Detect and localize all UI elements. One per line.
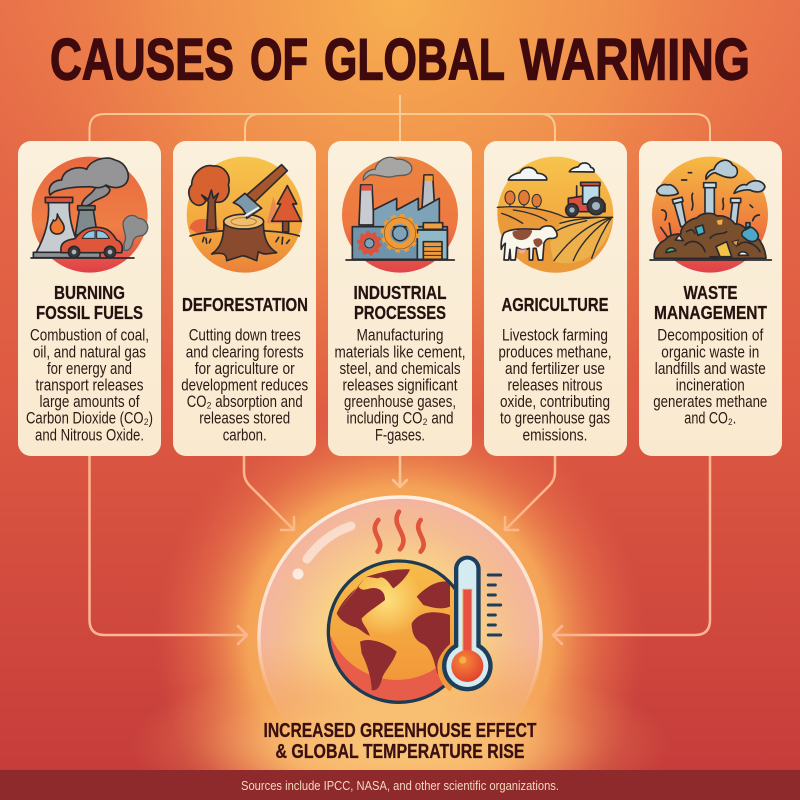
greenhouse bubble with globe and thermometer [150, 495, 649, 770]
text block [181, 327, 308, 444]
arrow: deforestation to globe [244, 456, 294, 530]
heading: FOSSIL FUELS [36, 303, 143, 323]
arrow: agriculture to globe [505, 456, 555, 530]
heading: MANAGEMENT [654, 303, 767, 323]
text block: releases stored [199, 410, 290, 428]
text block: for energy and [47, 360, 132, 378]
text block: Combustion of coal, [30, 327, 149, 345]
top connector lines [90, 95, 710, 141]
arrow: waste to globe [553, 456, 710, 644]
text block: carbon. [223, 426, 267, 444]
title: WARMING [520, 28, 750, 92]
text block: releases nitrous [508, 376, 602, 394]
text block: emissions. [522, 426, 588, 444]
text block: Carbon Dioxide (CO₂) [26, 410, 153, 428]
text block: incineration [676, 376, 745, 394]
text block [498, 327, 612, 444]
text block: for agriculture or [195, 360, 295, 378]
text block: Cutting down trees [189, 327, 301, 345]
panel: industrial processes [328, 141, 472, 456]
title [50, 28, 750, 92]
result label: & GLOBAL TEMPERATURE RISE [276, 740, 524, 763]
text block: and fertilizer use [505, 360, 605, 378]
icon: heat waves [375, 512, 424, 552]
text block: development reduces [181, 376, 308, 394]
footer bar [0, 770, 800, 800]
text block: oxide, contributing [500, 393, 610, 411]
text block: Decomposition of [657, 327, 764, 345]
heading: AGRICULTURE [502, 295, 608, 315]
text block: Livestock farming [502, 327, 608, 345]
text block: and clearing forests [186, 343, 304, 361]
title: OF [250, 28, 308, 92]
icon: farm with cow and tractor [497, 157, 613, 273]
text block [26, 327, 153, 444]
icon: power plant and car [31, 157, 148, 273]
text block: F-gases. [375, 426, 425, 444]
lower connector arrows [90, 456, 710, 644]
text block: produces methane, [498, 343, 612, 361]
heading [36, 283, 143, 323]
text block [653, 327, 767, 428]
icon: landfill with vents [650, 157, 771, 273]
text block: organic waste in [661, 343, 759, 361]
result label [264, 719, 537, 763]
text block: landfills and waste [655, 360, 766, 378]
heading [354, 283, 446, 323]
heading: PROCESSES [354, 303, 446, 323]
text block: CO₂ absorption and [187, 393, 303, 411]
icon: axe in tree stump [187, 157, 303, 273]
text block: including CO₂ and [346, 410, 454, 428]
text block: and CO₂. [684, 410, 736, 428]
heading: DEFORESTATION [182, 295, 308, 315]
arrow: fossil fuels to globe [90, 456, 247, 644]
text block: to greenhouse gas [500, 410, 610, 428]
text block [334, 327, 466, 444]
icon: factory with gears [342, 157, 458, 273]
title: CAUSES [50, 28, 234, 92]
heading: BURNING [54, 283, 125, 303]
panel: deforestation [173, 141, 316, 456]
panel: waste management [639, 141, 782, 456]
heading: WASTE [684, 283, 738, 303]
heading: INDUSTRIAL [354, 283, 446, 303]
heading [654, 283, 767, 323]
result label: INCREASED GREENHOUSE EFFECT [264, 719, 537, 742]
source note: Sources include IPCC, NASA, and other scientific organizations. [241, 778, 559, 793]
panel: agriculture [484, 141, 627, 456]
icon: thermometer [437, 556, 501, 692]
text block: Manufacturing [356, 327, 444, 345]
title: GLOBAL [324, 28, 505, 92]
text block: transport releases [36, 376, 144, 394]
text block: materials like cement, [334, 343, 466, 361]
text block: and Nitrous Oxide. [35, 426, 144, 444]
text block: greenhouse gases, [344, 393, 456, 411]
text block: large amounts of [40, 393, 140, 411]
arrow: industrial to globe [393, 456, 407, 487]
text block: releases significant [342, 376, 458, 394]
text block: generates methane [653, 393, 767, 411]
panel: burning fossil fuels [18, 141, 161, 456]
icon: globe [326, 559, 454, 704]
text block: oil, and natural gas [33, 343, 146, 361]
text block: steel, and chemicals [340, 360, 460, 378]
